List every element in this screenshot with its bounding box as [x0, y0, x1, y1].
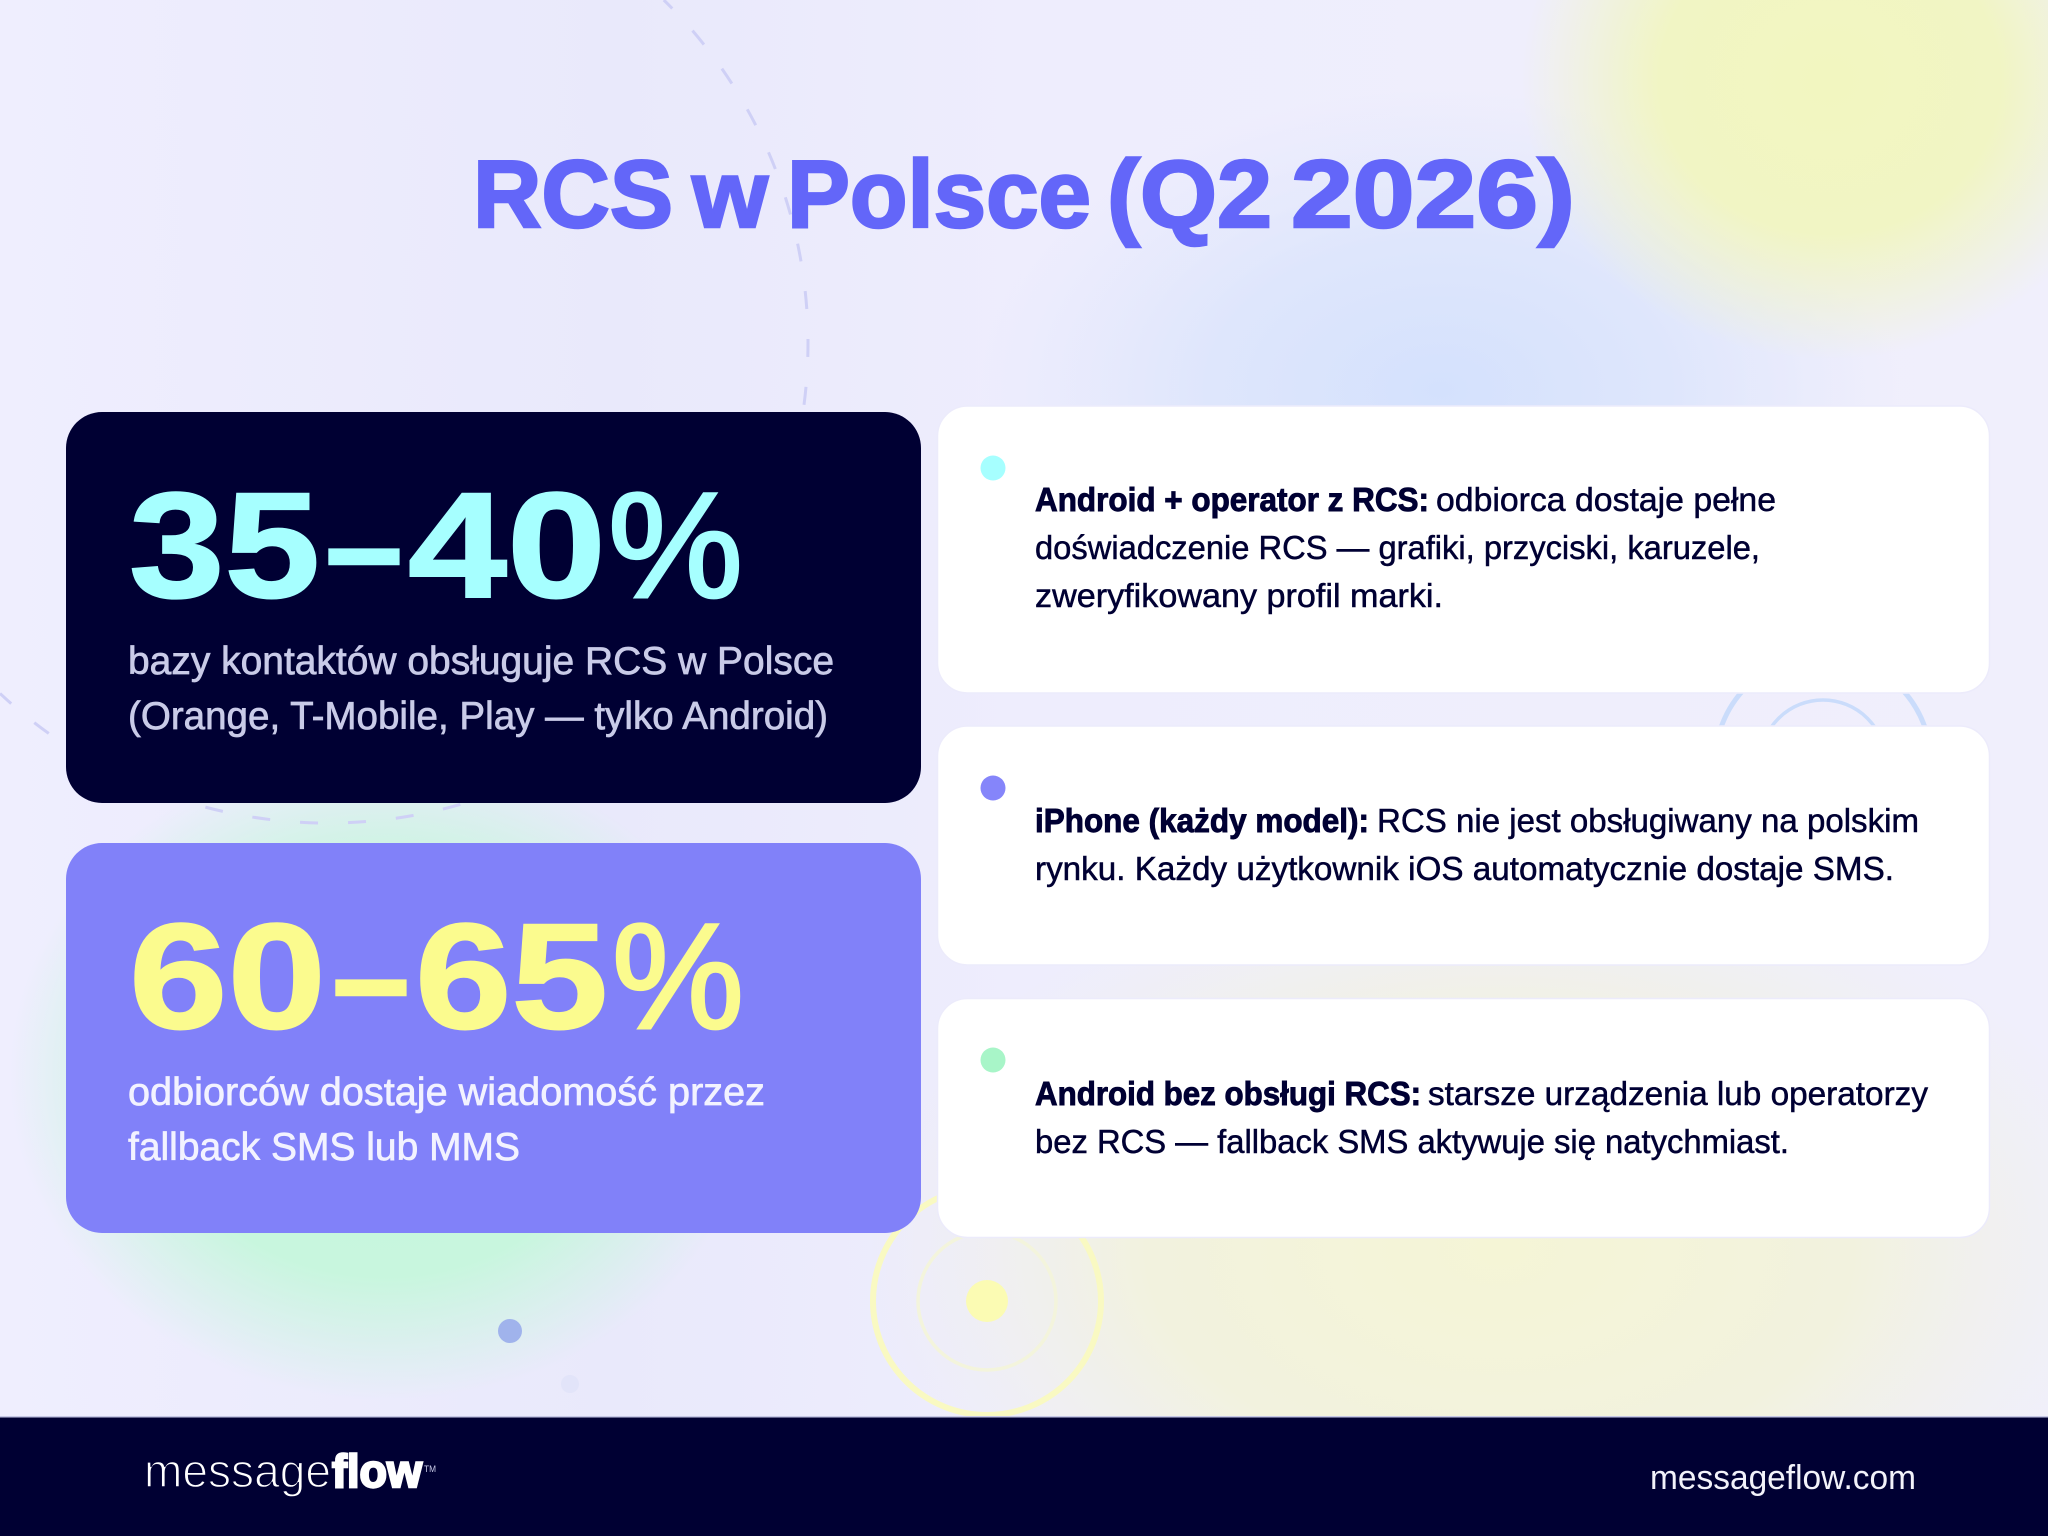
text: Android + operator [1035, 481, 1776, 614]
title: RCS [473, 141, 673, 248]
big number: 35–40% [129, 461, 743, 629]
text: iPhone: rynku. Każdy użytkownik iOS automatycznie dostaje SMS. [1035, 850, 1894, 887]
big number: 60–65% [129, 892, 744, 1060]
big number: 60–65%: – [332, 892, 410, 1060]
text: iPhone: RCS nie jest obsługiwany na polskim [1377, 802, 1919, 839]
website url: messageflow.com [1650, 1459, 1916, 1497]
big number: 35–40%: – [325, 461, 403, 629]
big number: 60–65%: % [612, 892, 744, 1060]
big number: 60–65%: 60 [129, 892, 326, 1060]
bullet: green [980, 1048, 1006, 1072]
decoration: small dots [498, 1319, 579, 1393]
text: Android + operator: doświadczenie RCS — grafiki, przyciski, karuzele, [1035, 529, 1760, 566]
logo: messageflow: TM [424, 1464, 436, 1474]
logo: messageflow [144, 1444, 436, 1497]
panel: 35–40% stat [66, 412, 921, 803]
description: fallback: odbiorców dostaje wiadomość przez [128, 1071, 765, 1114]
description: contact base [128, 640, 834, 738]
panel: iPhone [938, 726, 1990, 965]
title: Polsce [787, 141, 1091, 248]
decoration: blue rings [1715, 655, 1931, 871]
text: iPhone: iPhone (każdy model): [1035, 802, 1369, 839]
text: Android without RCS: bez RCS — fallback SMS aktywuje się natychmiast. [1035, 1123, 1789, 1160]
big number: 35–40%: % [608, 461, 743, 629]
title: (Q2 [1107, 141, 1272, 248]
panel: Android + operator [938, 406, 1990, 693]
panel: 60–65% stat [66, 843, 921, 1233]
text: Android + operator: odbiorca dostaje pełne [1436, 481, 1776, 518]
bullet: violet [980, 776, 1006, 800]
text: Android + operator: Android + operator z RCS: [1035, 481, 1429, 518]
panel: Android without RCS [938, 998, 1990, 1238]
description: fallback: fallback SMS lub MMS [128, 1126, 520, 1169]
logo: messageflow: flow [332, 1445, 422, 1497]
big number: 35–40%: 40 [408, 461, 606, 629]
description: contact base: bazy kontaktów obsługuje RCS w Polsce [128, 640, 834, 683]
description: contact base: (Orange, T-Mobile, Play — tylko Android) [128, 695, 828, 738]
logo: messageflow: message [144, 1444, 331, 1497]
text: Android + operator: zweryfikowany profil marki. [1035, 577, 1443, 614]
text: Android without RCS: starsze urządzenia lub operatorzy [1428, 1075, 1928, 1112]
title [473, 141, 1575, 248]
big number: 60–65%: 65 [415, 892, 608, 1060]
text: Android without RCS: Android bez obsługi RCS: [1035, 1075, 1421, 1112]
bullet: cyan [980, 456, 1006, 480]
footer [0, 1416, 2048, 1536]
text: Android without RCS [1035, 1075, 1928, 1160]
decoration: yellow target rings [873, 1187, 1101, 1415]
description: fallback [128, 1071, 765, 1169]
text: iPhone [1035, 802, 1919, 887]
title: 2026) [1291, 141, 1575, 248]
big number: 35–40%: 35 [129, 461, 320, 629]
title: w [691, 141, 768, 248]
